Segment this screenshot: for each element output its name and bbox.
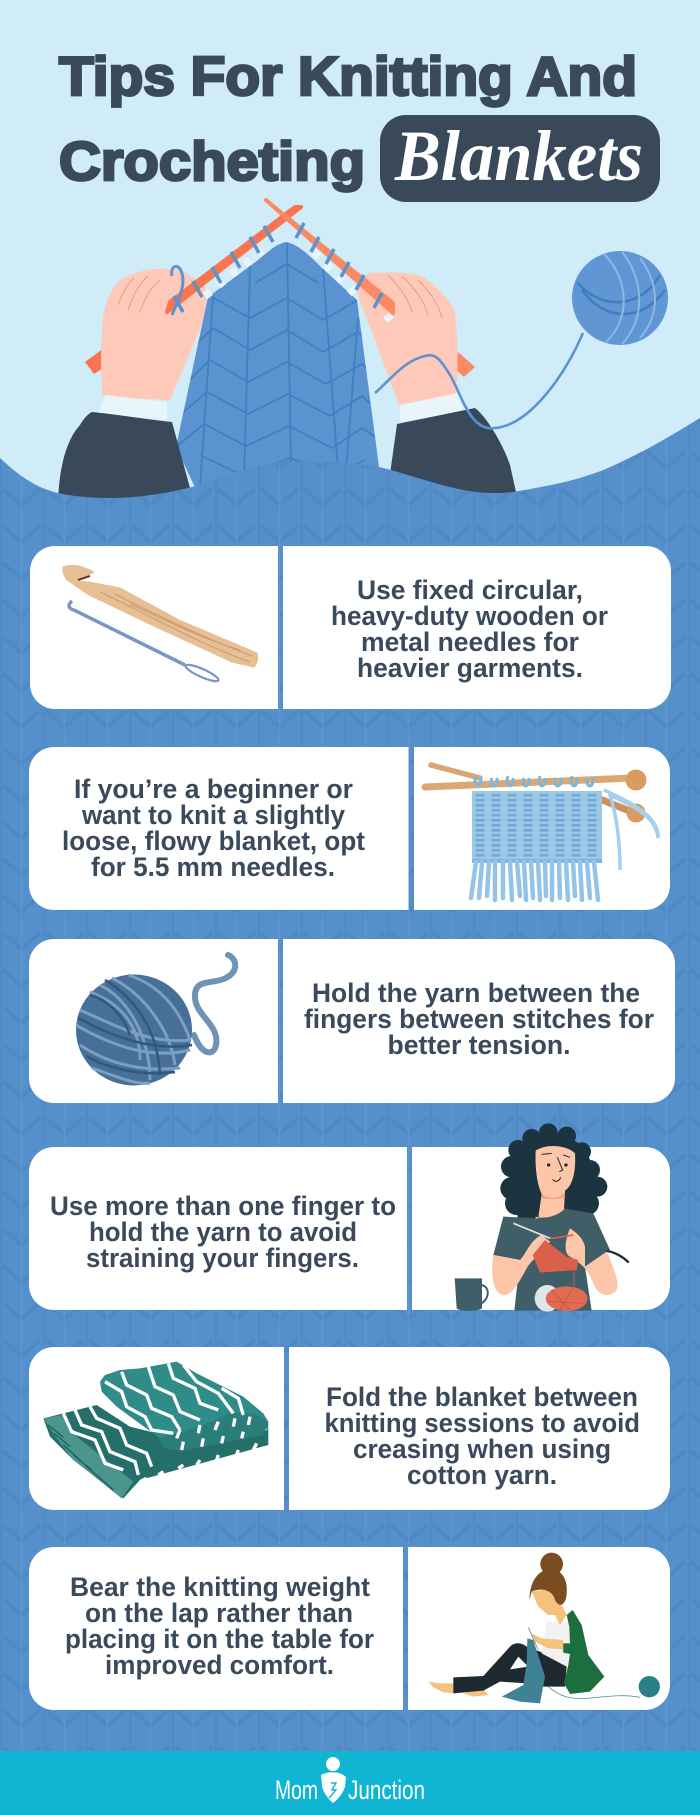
logo [275, 1757, 425, 1805]
left cuff and sleeve [58, 395, 196, 510]
tip text: Fold the blanket between [326, 1382, 638, 1412]
lower layer [43, 1405, 268, 1498]
knitted panel [176, 242, 380, 500]
face [532, 1588, 567, 1625]
tip text: fingers between stitches for [304, 1004, 654, 1034]
mug [455, 1278, 482, 1311]
yarn balls [535, 1285, 560, 1312]
upper layer [100, 1362, 268, 1445]
tip text: Bear the knitting weight [70, 1572, 370, 1602]
stitches on needles [174, 223, 382, 312]
tip text: Use fixed circular, [357, 575, 583, 605]
tip text: Hold the yarn between the [312, 978, 640, 1008]
tip text: heavy-duty wooden or [331, 601, 608, 631]
hero illustration: hands knitting [58, 200, 668, 510]
trousers [453, 1643, 567, 1693]
tip text: on the lap rather than [85, 1598, 353, 1628]
tip text [304, 978, 654, 1060]
illustration: folded blanket [43, 1362, 268, 1498]
ball [639, 1676, 660, 1697]
tip text: heavier garments. [357, 653, 583, 683]
panel: needle size tip [29, 747, 670, 910]
tip text [331, 575, 608, 683]
tip text [65, 1572, 374, 1680]
panel: finger tip [29, 1123, 670, 1312]
tip text [50, 1191, 396, 1273]
knitted piece [502, 1638, 545, 1703]
knitted blue background [0, 418, 700, 1815]
icon: wool ball [76, 955, 235, 1086]
icon: yarn ball [572, 251, 668, 345]
illustration: woman crocheting [455, 1123, 629, 1312]
tip text [62, 774, 365, 882]
tip text: hold the yarn to avoid [89, 1217, 357, 1247]
needles [167, 200, 393, 313]
icon: crochet hook and needle [63, 565, 258, 684]
title [59, 45, 660, 202]
tip text: metal needles for [361, 627, 579, 657]
tip text: loose, flowy blanket, opt [62, 826, 365, 856]
hair [529, 1568, 567, 1605]
shirt [493, 1208, 610, 1311]
tip text: knitting sessions to avoid [324, 1408, 640, 1438]
right hand [357, 272, 458, 408]
shirt [542, 1622, 570, 1667]
stitch gaps [205, 250, 392, 322]
left hand [101, 269, 207, 400]
face and neck [536, 1146, 575, 1218]
illustration: woman knitting on floor [428, 1553, 660, 1703]
crochet work [533, 1240, 578, 1273]
footer band [0, 1751, 700, 1815]
title: Crocheting [59, 130, 365, 192]
right cuff and sleeve [385, 393, 520, 510]
tip text [324, 1382, 640, 1490]
tip text: improved comfort. [105, 1650, 334, 1680]
tip text: for 5.5 mm needles. [91, 852, 335, 882]
yarn loop at thumb [172, 266, 183, 315]
panel: yarn tension tip [29, 939, 675, 1103]
tip text: placing it on the table for [65, 1624, 374, 1654]
tip text: If you’re a beginner or [74, 774, 353, 804]
icon: knitted swatch on needles [425, 765, 658, 900]
arms [492, 1235, 550, 1295]
tip text: Use more than one finger to [50, 1191, 396, 1221]
panel: lap tip [29, 1547, 670, 1710]
panel: needles tip [30, 546, 671, 709]
tip text: better tension. [388, 1030, 570, 1060]
feet [428, 1682, 488, 1697]
title: Tips For Knitting And [59, 45, 637, 107]
tip text: cotton yarn. [407, 1460, 557, 1490]
logo: Junction [348, 1775, 425, 1805]
cardigan [563, 1610, 604, 1694]
highlighted word pill: Blankets [394, 116, 643, 196]
logo: Mom [275, 1775, 318, 1805]
tip text: want to knit a slightly [81, 800, 345, 830]
tip text: creasing when using [353, 1434, 611, 1464]
yarn [548, 1687, 640, 1699]
yarn strand [375, 333, 583, 428]
lower needle ends [85, 348, 475, 377]
panel: folding tip [29, 1347, 670, 1510]
hair [500, 1123, 607, 1224]
tip text: straining your fingers. [86, 1243, 359, 1273]
arm [532, 1633, 563, 1649]
